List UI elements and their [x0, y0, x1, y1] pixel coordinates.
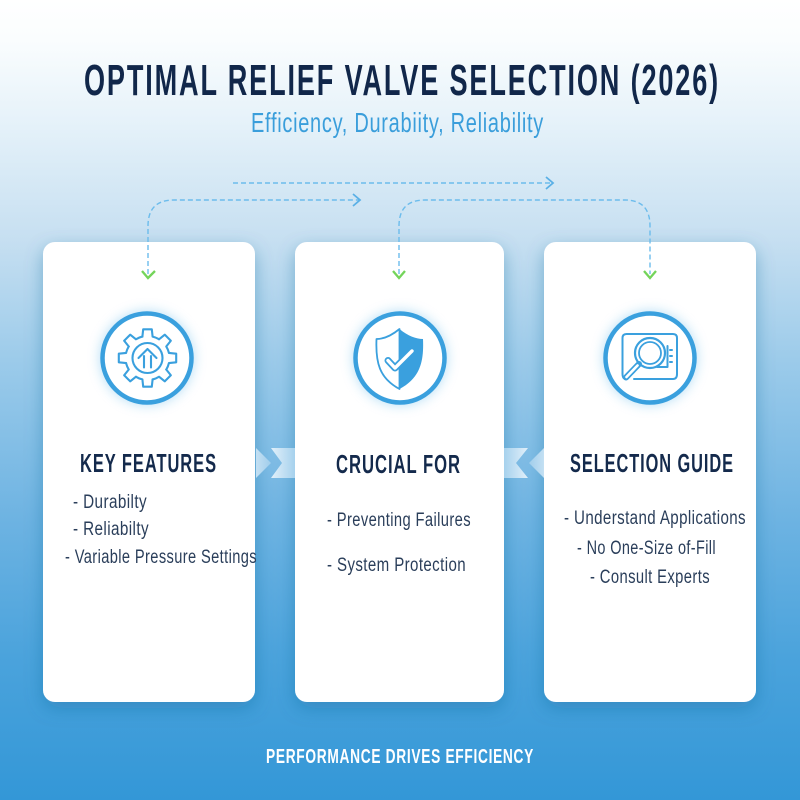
- subtitle: Efficiency, Durabiity, Reliability: [251, 107, 544, 138]
- list: key features: - Durabilty: [73, 492, 147, 513]
- icon: magnifier over document: [603, 311, 697, 405]
- heading: crucial for: CRUCIAL FOR: [336, 449, 461, 479]
- icon: gear with up arrow: [100, 311, 194, 405]
- list: key features: - Variable Pressure Settings: [65, 547, 257, 568]
- arrow: top straight dashed: [233, 177, 553, 189]
- list: selection guide: - No One-Size of-Fill: [577, 538, 716, 559]
- panel: crucial for: [295, 242, 504, 702]
- arrow: dashed from first card to centre: [142, 194, 360, 278]
- list: key features: [65, 492, 257, 568]
- icon: shield with check: [353, 311, 447, 405]
- list: key features: - Reliabilty: [73, 519, 149, 540]
- list: crucial for: - Preventing Failures: [327, 510, 471, 531]
- heading: key features: KEY FEATURES: [80, 448, 217, 478]
- list: selection guide: - Consult Experts: [590, 567, 710, 588]
- list: crucial for: - System Protection: [327, 555, 466, 576]
- arrow: dashed connector between second and third cards: [393, 200, 656, 278]
- list: selection guide: - Understand Applications: [564, 508, 746, 529]
- arrow: chevron from key features to crucial for: [256, 448, 295, 478]
- list: selection guide: [564, 508, 746, 588]
- list: crucial for: [327, 510, 471, 576]
- panel: key features: [43, 242, 257, 702]
- footer tagline: PERFORMANCE DRIVES EFFICIENCY: [266, 746, 534, 768]
- panel: selection guide: [544, 242, 756, 702]
- arrow: chevron from selection guide to crucial for: [504, 448, 544, 478]
